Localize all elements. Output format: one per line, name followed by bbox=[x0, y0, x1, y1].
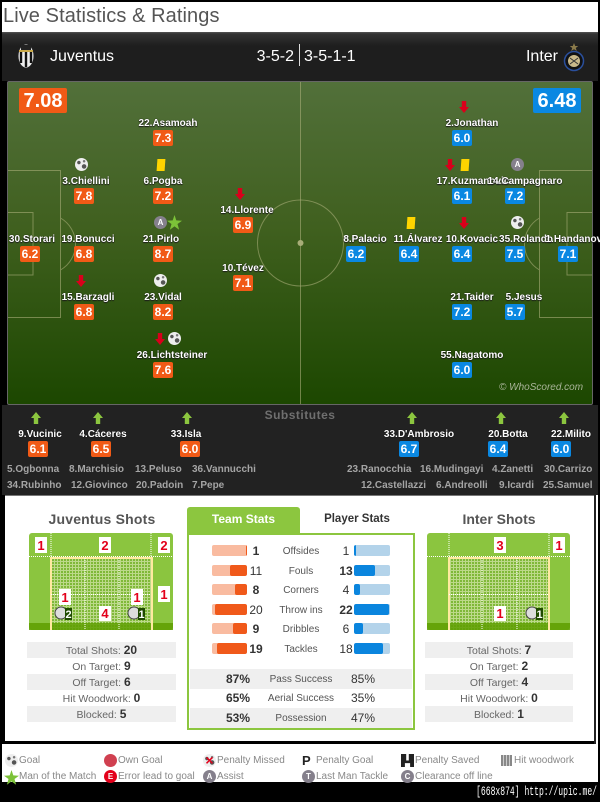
player: Pogba bbox=[143, 159, 183, 204]
text: 22 bbox=[339, 603, 353, 617]
tab: Player Stats: Player Stats bbox=[324, 513, 390, 525]
text: 20 bbox=[249, 603, 263, 617]
player: Campagnaro: A bbox=[515, 160, 520, 169]
stat: Corners bbox=[190, 583, 410, 597]
stats: Juventus shots: Blocked: 5 bbox=[77, 707, 126, 721]
player: Jesus: 5.Jesus bbox=[506, 292, 542, 303]
panel: substitutes bbox=[2, 405, 598, 495]
player: Rolando bbox=[498, 216, 554, 262]
legend: Own Goal bbox=[118, 755, 162, 766]
text: 18 bbox=[339, 642, 353, 656]
player: Jesus bbox=[505, 292, 542, 320]
player: Jonathan: 6.0 bbox=[454, 131, 470, 145]
stats: Juventus shots: Hit Woodwork: 0 bbox=[63, 691, 140, 705]
watermark: © WhoScored.com bbox=[499, 382, 583, 393]
legend: Penalty Goal bbox=[316, 755, 373, 766]
image host caption: [668x874] http://upic.me/ bbox=[476, 784, 597, 799]
chart: Inter goal map: 1 bbox=[496, 606, 504, 621]
player: Vidal bbox=[144, 274, 182, 320]
player: Barzagli: 6.8 bbox=[76, 305, 92, 319]
player: Taider bbox=[450, 292, 494, 320]
player: Lichtsteiner: 26.Lichtsteiner bbox=[137, 350, 207, 361]
sub: Caceres bbox=[79, 412, 127, 457]
player: Asamoah: 22.Asamoah bbox=[139, 118, 197, 129]
substitutes heading: Substitutes bbox=[265, 408, 335, 422]
player: Rolando: 35.Rolando bbox=[499, 234, 553, 245]
legend: Last Man Tackle bbox=[316, 771, 388, 782]
chart: Juventus goal map: 1 bbox=[61, 590, 69, 605]
legend: Penalty Saved bbox=[415, 755, 480, 766]
player: Bonucci bbox=[61, 234, 115, 262]
chart: Inter goal map: 3 bbox=[496, 538, 504, 553]
player: Kuzmanovic: 6.1 bbox=[454, 189, 470, 203]
text: 1 bbox=[253, 544, 259, 558]
player: Nagatomo: 6.0 bbox=[454, 363, 470, 377]
player: Pogba: 7.2 bbox=[155, 189, 171, 203]
player: Handanovic: 7.1 bbox=[560, 247, 576, 261]
legend: Man of the Match bbox=[19, 771, 96, 782]
player: Pirlo: 8.7 bbox=[155, 247, 171, 261]
stats: Inter shots bbox=[425, 642, 573, 722]
chart: Juventus goal map: 4 bbox=[101, 606, 109, 621]
player: Campagnaro bbox=[487, 158, 563, 204]
sub: D'Ambrosio: 33.D'Ambrosio bbox=[384, 429, 454, 440]
stats: Juventus shots: On Target: 9 bbox=[72, 659, 131, 673]
stats: Juventus shots bbox=[27, 642, 176, 722]
player: Storari: 30.Storari bbox=[9, 234, 55, 245]
player: Asamoah: 7.3 bbox=[155, 131, 171, 145]
chart: Juventus goal map: 1 bbox=[37, 538, 45, 553]
legend: Error lead to goal bbox=[118, 771, 195, 782]
text: 11 bbox=[250, 564, 262, 578]
bench: Inter: 16.Mudingayi bbox=[420, 464, 483, 475]
player: Palacio: 6.2 bbox=[348, 247, 364, 261]
home team name: Juventus bbox=[50, 48, 114, 65]
player: Bonucci: 6.8 bbox=[76, 247, 92, 261]
bench: Juventus: 34.Rubinho bbox=[7, 480, 61, 491]
text: 13 bbox=[339, 564, 353, 578]
player: Handanovic bbox=[545, 234, 600, 262]
sub: Vucinic: 9.Vucinic bbox=[18, 429, 62, 440]
player: Tevez: 10.Tévez bbox=[222, 263, 264, 274]
player: Campagnaro: 14.Campagnaro bbox=[487, 176, 563, 187]
panel: team stats bbox=[187, 533, 415, 730]
panel: stats bbox=[5, 495, 594, 741]
bench: Juventus: 36.Vannucchi bbox=[192, 464, 256, 475]
bench: Inter: 23.Ranocchia bbox=[347, 464, 411, 475]
panel: pitch bbox=[7, 81, 593, 405]
player: Rolando: 7.5 bbox=[507, 247, 523, 261]
bench: Juventus: 20.Padoin bbox=[136, 480, 183, 491]
chart: Inter goal map: 1 bbox=[555, 538, 563, 553]
chart: Juventus goal map: 2 bbox=[160, 538, 168, 553]
text: 9 bbox=[253, 622, 259, 636]
percent stats table: Possession bbox=[275, 713, 327, 724]
bench: Juventus: 7.Pepe bbox=[192, 480, 224, 491]
stats: Inter shots: On Target: 2 bbox=[470, 659, 528, 673]
sub: Vucinic bbox=[18, 412, 62, 457]
stat: Throw ins bbox=[190, 603, 410, 617]
player: Nagatomo: 55.Nagatomo bbox=[441, 350, 503, 361]
player: Bonucci: 19.Bonucci bbox=[61, 234, 115, 245]
title bar bbox=[2, 2, 598, 32]
legend: × bbox=[205, 752, 214, 768]
player: Chiellini: 7.8 bbox=[76, 189, 92, 203]
player: Alvarez: 11.Álvarez bbox=[394, 234, 442, 245]
chart: Juventus goal map: 1 bbox=[133, 590, 141, 605]
sub: Botta: 6.4 bbox=[490, 442, 506, 456]
bench: Juventus bbox=[7, 464, 256, 491]
player: Tevez bbox=[222, 263, 264, 291]
bench: Juventus: 8.Marchisio bbox=[69, 464, 124, 475]
chart: Juventus goal map: 1 bbox=[138, 609, 145, 621]
legend bbox=[2, 744, 598, 782]
text: 4 bbox=[343, 583, 349, 597]
chart: Juventus goal map: 1 bbox=[160, 587, 168, 602]
legend: Hit woodwork bbox=[514, 755, 574, 766]
player: Storari bbox=[8, 234, 55, 262]
player: Taider: 21.Taider bbox=[450, 292, 494, 303]
bench: Inter: 9.Icardi bbox=[499, 480, 534, 491]
percent stats table: 85% bbox=[351, 672, 375, 686]
text: Tackles bbox=[284, 644, 318, 655]
player: Kovacic: 10.Kovacic bbox=[446, 234, 498, 245]
player: Palacio bbox=[343, 234, 387, 262]
percent stats table: 65% bbox=[226, 691, 250, 705]
player: Alvarez bbox=[394, 217, 443, 262]
sub: Botta bbox=[488, 412, 528, 457]
percent stats table bbox=[190, 669, 412, 728]
player: Palacio: 8.Palacio bbox=[343, 234, 387, 245]
stats: Inter shots: Total Shots: 7 bbox=[467, 643, 531, 657]
sub: Isla: 33.Isla bbox=[171, 429, 201, 440]
sub: Botta: 20.Botta bbox=[488, 429, 528, 440]
sub: Milito bbox=[551, 412, 591, 457]
tab: Team Stats: Team Stats bbox=[212, 512, 275, 526]
player: Vidal: 23.Vidal bbox=[144, 292, 182, 303]
heading: Juventus shots: Juventus Shots bbox=[48, 511, 156, 527]
sub: Caceres: 6.5 bbox=[93, 442, 109, 456]
chart: Juventus goal map: 2 bbox=[101, 538, 109, 553]
text: Dribbles bbox=[283, 624, 319, 635]
sub: Vucinic: 6.1 bbox=[30, 442, 46, 456]
player: Barzagli bbox=[62, 275, 114, 320]
player: Pirlo: A bbox=[158, 218, 163, 227]
icon: Juventus crest bbox=[18, 44, 34, 68]
player: Kuzmanovic: 17.Kuzmanovic bbox=[437, 176, 509, 187]
chart: Inter goal map: 1 bbox=[536, 609, 543, 621]
text: Offsides bbox=[283, 546, 319, 557]
player: Pirlo bbox=[142, 215, 182, 262]
legend: T bbox=[306, 772, 311, 781]
away team rating: 6.48 bbox=[538, 90, 576, 112]
bench: Inter: 4.Zanetti bbox=[492, 464, 533, 475]
chart: Juventus goal map bbox=[29, 533, 173, 630]
stats: Juventus shots: Off Target: 6 bbox=[72, 675, 131, 689]
player: Chiellini: 3.Chiellini bbox=[62, 176, 110, 187]
home team rating: 7.08 bbox=[24, 90, 62, 112]
player: Llorente: 14.Llorente bbox=[220, 205, 274, 216]
stats: Inter shots: Hit Woodwork: 0 bbox=[460, 691, 538, 705]
text: 8 bbox=[253, 583, 259, 597]
stat: Tackles bbox=[190, 642, 410, 656]
legend: Goal bbox=[19, 755, 40, 766]
sub: Milito: 6.0 bbox=[553, 442, 569, 456]
bench: Juventus: 12.Giovinco bbox=[71, 480, 128, 491]
sub: Isla bbox=[171, 412, 202, 457]
legend: E bbox=[108, 772, 113, 781]
player: Llorente: 6.9 bbox=[235, 218, 251, 232]
percent stats table: 87% bbox=[226, 672, 250, 686]
legend: C bbox=[405, 772, 410, 781]
player: Alvarez: 6.4 bbox=[401, 247, 417, 261]
bench: Inter bbox=[347, 464, 592, 491]
text: 19 bbox=[249, 642, 263, 656]
player: Campagnaro: 7.2 bbox=[507, 189, 523, 203]
player: Kuzmanovic bbox=[436, 159, 510, 204]
stats: Inter shots: Off Target: 4 bbox=[470, 675, 528, 689]
player: Vidal: 8.2 bbox=[155, 305, 171, 319]
legend: P bbox=[302, 753, 311, 768]
player: Barzagli: 15.Barzagli bbox=[62, 292, 114, 303]
heading: Inter shots: Inter Shots bbox=[462, 511, 536, 527]
text: Corners bbox=[283, 585, 319, 596]
legend: Assist bbox=[217, 771, 244, 782]
bench: Juventus: 13.Peluso bbox=[135, 464, 182, 475]
text: 6 bbox=[343, 622, 349, 636]
player: Chiellini bbox=[62, 158, 110, 204]
percent stats table: Pass Success bbox=[270, 674, 332, 685]
player: Taider: 7.2 bbox=[454, 305, 470, 319]
percent stats table: 53% bbox=[226, 711, 250, 725]
chart: Juventus goal map: 2 bbox=[65, 609, 72, 621]
bench: Juventus: 5.Ogbonna bbox=[7, 464, 59, 475]
percent stats table: 47% bbox=[351, 711, 375, 725]
percent stats table: Aerial Success bbox=[268, 693, 334, 704]
stat: Offsides bbox=[190, 544, 410, 558]
player: Tevez: 7.1 bbox=[235, 276, 251, 290]
match header bbox=[2, 32, 598, 81]
legend: A bbox=[207, 772, 212, 781]
player: Pirlo: 21.Pirlo bbox=[143, 234, 179, 245]
player: Asamoah bbox=[138, 118, 198, 146]
home formation: 3-5-2 bbox=[257, 48, 294, 65]
text: Throw ins bbox=[279, 605, 323, 616]
bench: Inter: 30.Carrizo bbox=[544, 464, 592, 475]
player: Jonathan: 2.Jonathan bbox=[446, 118, 498, 129]
tab: Team Stats bbox=[187, 507, 300, 534]
bench: Inter: 12.Castellazzi bbox=[361, 480, 426, 491]
sub: Isla: 6.0 bbox=[182, 442, 198, 456]
sub: D'Ambrosio bbox=[384, 412, 454, 457]
player: Jonathan bbox=[446, 101, 498, 146]
title bar: Live Statistics & Ratings bbox=[3, 5, 220, 27]
away formation: 3-5-1-1 bbox=[304, 48, 356, 65]
bench: Inter: 25.Samuel bbox=[543, 480, 592, 491]
sub: Milito: 22.Milito bbox=[551, 429, 591, 440]
text: Fouls bbox=[289, 566, 313, 577]
player: Kovacic: 6.4 bbox=[454, 247, 470, 261]
stats: Inter shots: Blocked: 1 bbox=[474, 707, 524, 721]
legend: Penalty Missed bbox=[217, 755, 285, 766]
player: Pogba: 6.Pogba bbox=[144, 176, 182, 187]
stats: Juventus shots: Total Shots: 20 bbox=[66, 643, 137, 657]
sub: Caceres: 4.Cáceres bbox=[79, 429, 127, 440]
legend: Clearance off line bbox=[415, 771, 493, 782]
bench: Inter: 6.Andreolli bbox=[436, 480, 488, 491]
stat: Dribbles bbox=[190, 622, 410, 636]
chart: Inter goal map bbox=[427, 533, 570, 630]
player: Storari: 6.2 bbox=[22, 247, 38, 261]
player: Lichtsteiner bbox=[136, 332, 208, 378]
player: Lichtsteiner: 7.6 bbox=[155, 363, 171, 377]
text: 1 bbox=[343, 544, 349, 558]
player: Llorente bbox=[220, 188, 274, 233]
percent stats table: 35% bbox=[351, 691, 375, 705]
stat: Fouls bbox=[190, 564, 410, 578]
icon: Inter crest bbox=[564, 43, 584, 72]
away team name: Inter bbox=[526, 48, 558, 65]
player: Nagatomo bbox=[440, 350, 504, 378]
player: Kovacic bbox=[446, 217, 498, 262]
player: Jesus: 5.7 bbox=[507, 305, 523, 319]
sub: D'Ambrosio: 6.7 bbox=[401, 442, 417, 456]
